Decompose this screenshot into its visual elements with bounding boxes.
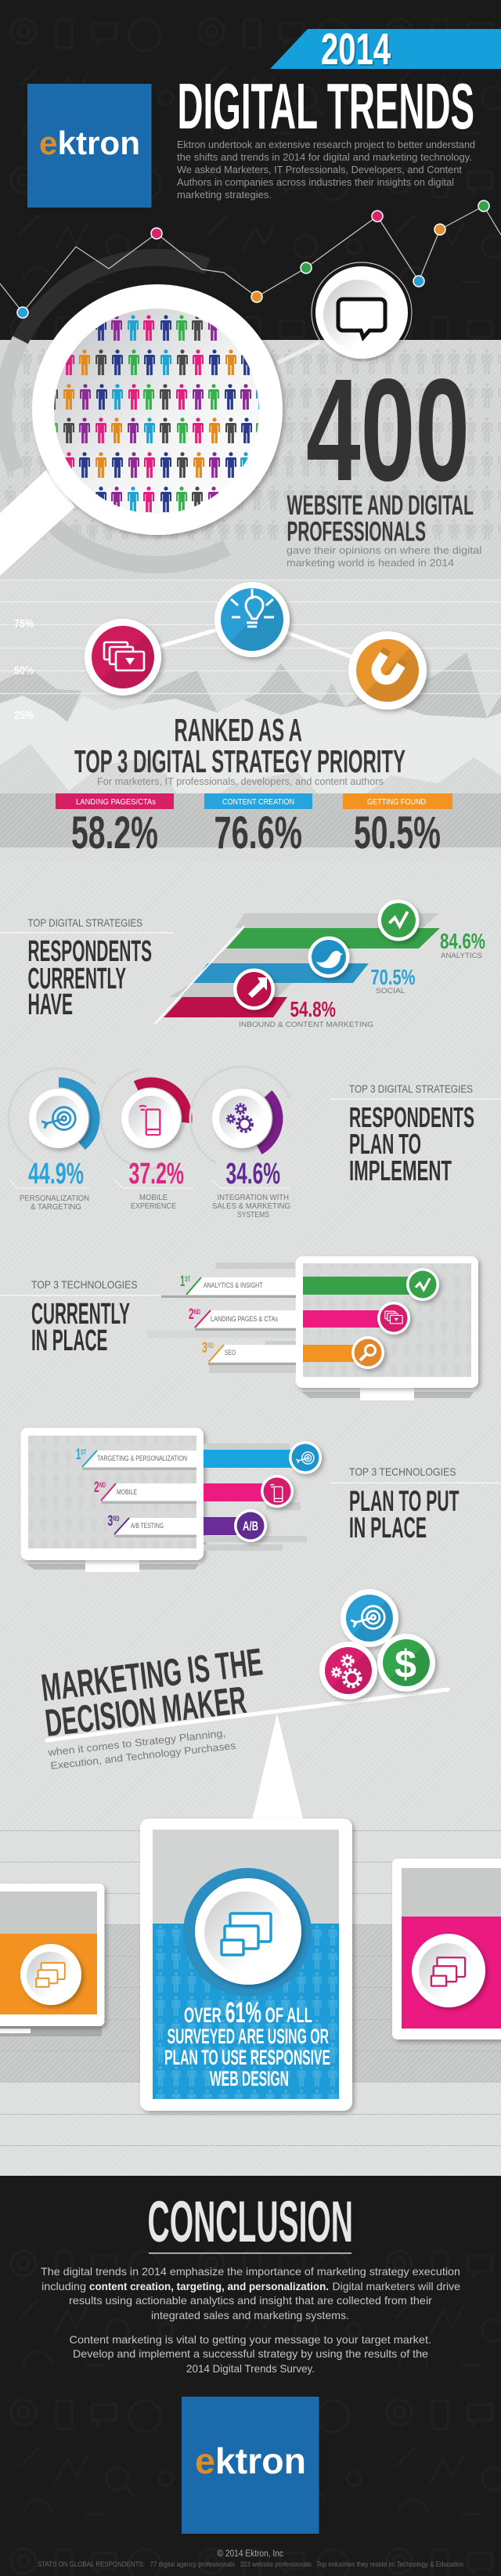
callout text: WEB DESIGN <box>210 2067 289 2090</box>
heading year: 2014 <box>321 24 391 74</box>
paragraph one: integrated sales and marketing systems. <box>151 2309 349 2321</box>
heading: PLAN TO <box>349 1128 421 1160</box>
callout text: OVER 61% OF ALL <box>184 1996 312 2029</box>
subtitle rotated: Execution, and Technology Purchases <box>50 1740 236 1772</box>
bar: analytics: ST <box>185 1275 190 1283</box>
people grid <box>47 315 267 512</box>
stat: inbound: 54.8% <box>290 997 336 1021</box>
background band: survey section <box>0 340 501 580</box>
label: TOP 3 DIGITAL STRATEGIES <box>349 1082 473 1095</box>
stat: content creation: 76.6% <box>214 807 302 858</box>
device: right tablet <box>392 1859 501 2039</box>
icon: gears ball <box>319 1642 377 1700</box>
stat: getting found <box>343 793 452 858</box>
intro text: We asked Marketers, IT Professionals, Developers, and Content <box>177 164 463 175</box>
paragraph one: Digital marketers will drive <box>332 2280 460 2292</box>
backing bands <box>147 1263 296 1373</box>
label: TOP 3 TECHNOLOGIES <box>349 1465 456 1478</box>
bar: landing pages <box>189 1302 410 1335</box>
stat: landing pages <box>56 793 174 858</box>
paragraph two: Develop and implement a successful strategy by using the results of the <box>73 2347 428 2360</box>
bar: mobile: MOBILE <box>117 1488 137 1497</box>
paragraph two: Content marketing is vital to getting your message to your target market. <box>69 2333 431 2346</box>
intro text <box>177 139 475 201</box>
paragraph one: The digital trends in 2014 emphasize the importance of marketing strategy execution <box>41 2265 460 2278</box>
label: TOP DIGITAL STRATEGIES <box>28 916 142 929</box>
bar: targeting: ST <box>81 1448 86 1456</box>
subheading: For marketers, IT professionals, developers, and content authors <box>97 775 384 787</box>
gauge: mobile: MOBILE <box>139 1193 168 1202</box>
stat: inbound <box>239 997 373 1029</box>
label: TOP 3 TECHNOLOGIES <box>31 1278 138 1291</box>
heading: professionals <box>287 490 474 547</box>
stat: content creation: CONTENT CREATION <box>222 797 294 807</box>
bar: seo: 3 <box>202 1340 211 1357</box>
magnifier ring light <box>3 340 227 565</box>
stat: inbound: INBOUND & CONTENT MARKETING <box>239 1021 373 1029</box>
intro text: Ektron undertook an extensive research project to better understand <box>177 139 475 150</box>
heading: top 3 priority <box>74 712 405 779</box>
bar: landing pages: LANDING PAGES & CTAs <box>211 1315 278 1324</box>
panel: strategies currently have <box>0 899 485 1029</box>
text: opinions <box>287 544 482 569</box>
paragraph one: results using actionable analytics and insight that are collected from their <box>69 2294 432 2307</box>
logo: ektron <box>195 2441 306 2481</box>
callout text <box>164 1996 330 2090</box>
logo <box>182 2397 319 2534</box>
icon: arrow <box>233 968 275 1010</box>
intro text: Authors in companies across industries their insights on digital <box>177 177 454 188</box>
icon: landing pages <box>85 619 161 695</box>
gauge: integration: 34.6% <box>225 1158 280 1190</box>
icon: target ball <box>341 1589 398 1647</box>
panel: technologies plan to put in place <box>20 1428 501 1572</box>
stat: social: SOCIAL <box>376 987 405 995</box>
stat: analytics: ANALYTICS <box>441 952 482 960</box>
paragraph one: including <box>41 2280 86 2292</box>
chart: slanted bars <box>155 913 440 1024</box>
copyright: © 2014 Ektron, Inc <box>218 2548 283 2559</box>
panel: strategies plan to implement <box>0 1048 501 1219</box>
bar: a/b testing: 3 <box>108 1513 116 1530</box>
stat: getting found: 50.5% <box>354 807 441 858</box>
stat: social: 70.5% <box>371 965 416 989</box>
bar: targeting <box>76 1441 322 1474</box>
bar: a/b testing <box>108 1509 267 1542</box>
heading: CURRENTLY <box>28 963 126 995</box>
heading: IN PLACE <box>349 1512 427 1544</box>
icon: analytics <box>377 899 420 941</box>
heading rotated: DECISION MAKER <box>43 1679 248 1745</box>
axis labels <box>14 617 34 722</box>
bar: seo: RD <box>207 1342 214 1349</box>
monitor <box>296 1256 478 1400</box>
heading: IN PLACE <box>31 1324 108 1357</box>
stat: social <box>371 965 416 995</box>
heading <box>28 935 152 1021</box>
bar: a/b testing: RD <box>113 1515 120 1523</box>
bar: a/b testing: A/B <box>243 1519 258 1534</box>
icon: dollar ball <box>377 1634 435 1692</box>
bar: mobile <box>94 1475 294 1508</box>
axis labels: 75% <box>14 617 34 630</box>
icon: social bird <box>308 937 349 977</box>
icon: dollar ball: $ <box>395 1642 416 1686</box>
paragraph two <box>69 2333 431 2375</box>
intro text: marketing strategies. <box>177 190 272 201</box>
heading: top 3 priority: RANKED AS A <box>174 712 302 748</box>
gauge: personalization: 44.9% <box>28 1158 84 1190</box>
subtitle rotated <box>47 1727 236 1772</box>
panel: decision maker seesaw <box>39 1589 449 1819</box>
icon: speech bubble <box>312 262 412 363</box>
magnifier ring dark <box>20 258 207 340</box>
seesaw stand <box>252 1714 303 1819</box>
background people pattern <box>0 340 501 540</box>
axis labels: 50% <box>14 664 34 677</box>
stat: analytics: 84.6% <box>440 929 485 953</box>
backing bands <box>82 1443 307 1551</box>
background bands: responsive section <box>0 1830 501 2176</box>
bar: seo <box>202 1336 384 1369</box>
connector lines <box>123 620 387 670</box>
heading <box>349 1101 474 1187</box>
paragraph one <box>41 2265 460 2321</box>
heading <box>31 1298 130 1357</box>
gauge: personalization <box>0 1050 127 1212</box>
bar: mobile: 2 <box>94 1479 103 1496</box>
device: left tablet <box>0 1884 105 2036</box>
seesaw beam <box>47 1689 449 1740</box>
logo <box>27 84 152 208</box>
text: opinions: marketing world is headed in 2014 <box>287 557 454 569</box>
paragraph two: 2014 Digital Trends Survey. <box>186 2362 315 2375</box>
gauge: mobile: EXPERIENCE <box>131 1201 176 1211</box>
bar: mobile: ND <box>99 1481 106 1489</box>
stat: landing pages: LANDING PAGES/CTAs <box>76 797 156 807</box>
gauge: integration <box>171 1048 312 1219</box>
gauge: personalization: PERSONALIZATION <box>20 1194 89 1203</box>
device: main tablet <box>140 1819 352 2111</box>
bar: landing pages: 2 <box>189 1306 197 1323</box>
panel: priorities chart background <box>0 580 501 862</box>
stat: content creation <box>204 793 312 858</box>
bar: analytics: 1 <box>180 1274 189 1290</box>
icon: magnifying glass <box>0 284 283 576</box>
stat: analytics <box>440 929 485 960</box>
bar: seo: SEO <box>225 1349 236 1357</box>
stat: landing pages: 58.2% <box>71 807 158 858</box>
heading rotated: MARKETING IS THE <box>39 1641 265 1710</box>
panel: header <box>0 0 501 340</box>
panel: conclusion <box>0 2176 501 2576</box>
banner 2014 <box>270 29 501 69</box>
icon: responsive screens <box>222 1913 271 1955</box>
bar: targeting: TARGETING & PERSONALIZATION <box>97 1454 187 1463</box>
connector line <box>278 342 319 363</box>
bar: analytics <box>180 1268 439 1301</box>
paragraph one: content creation, targeting, and personalization. <box>89 2280 329 2292</box>
heading rotated <box>39 1641 265 1745</box>
bar: targeting: 1 <box>76 1447 85 1463</box>
callout text: PLAN TO USE RESPONSIVE <box>164 2046 330 2069</box>
gauge: integration: SYSTEMS <box>237 1210 269 1219</box>
icon: magnet <box>348 631 427 710</box>
blue arch <box>183 1868 312 1996</box>
gauge: personalization: & TARGETING <box>31 1202 81 1212</box>
gauge: integration: SALES & MARKETING <box>212 1201 290 1211</box>
bar: a/b testing: A/B TESTING <box>131 1522 164 1530</box>
axis labels: 25% <box>14 709 34 722</box>
handle <box>0 470 75 576</box>
panel: responsive devices <box>0 1819 501 2111</box>
heading: RESPONDENTS <box>28 935 152 968</box>
heading <box>349 1485 460 1544</box>
icon: light bulb <box>214 582 290 657</box>
diagonal stripe texture <box>0 340 501 2176</box>
text: opinions: gave their opinions on where the digital <box>287 544 482 556</box>
monitor <box>20 1428 204 1572</box>
gauge: mobile: 37.2% <box>128 1158 184 1190</box>
subtitle rotated: when it comes to Strategy Planning, <box>47 1727 226 1758</box>
logo: ektron <box>39 125 140 161</box>
bar: analytics: ANALYTICS & INSIGHT <box>204 1281 263 1290</box>
gauge: integration: INTEGRATION WITH <box>218 1193 289 1202</box>
panel: technologies currently in place <box>0 1256 478 1400</box>
stat: getting found: GETTING FOUND <box>367 797 426 807</box>
intro text: the shifts and trends in 2014 for digital and marketing technology. <box>177 152 472 163</box>
line chart <box>0 201 501 318</box>
callout text: SURVEYED ARE USING OR <box>168 2025 329 2048</box>
heading: CURRENTLY <box>31 1298 130 1331</box>
heading: HAVE <box>28 988 73 1021</box>
gauge: mobile <box>83 1050 219 1211</box>
bar: landing pages: ND <box>194 1308 200 1316</box>
